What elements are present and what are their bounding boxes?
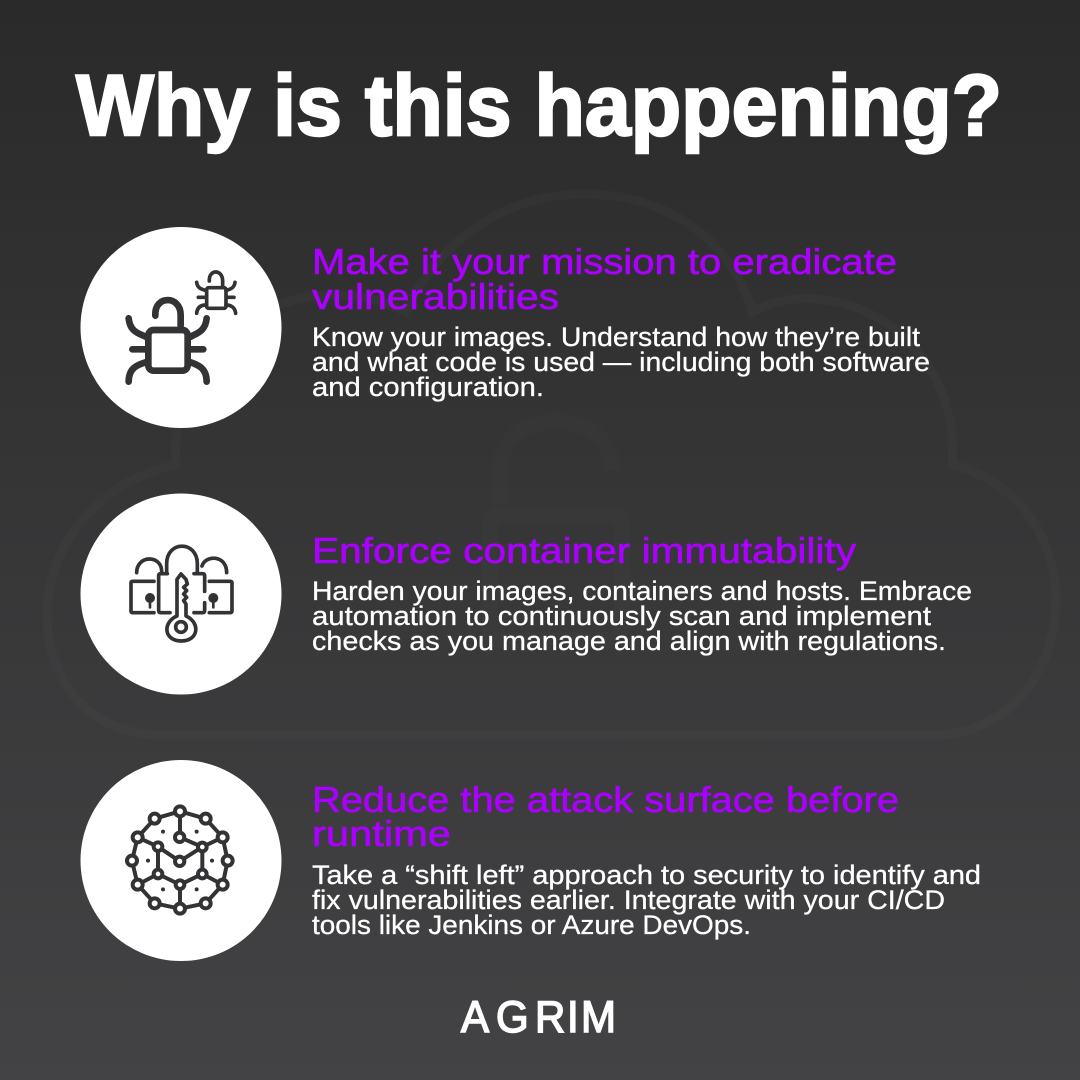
title: Why is this happening?: [76, 58, 1002, 154]
text block: Harden your images, containers and hosts. Embrace: [312, 576, 972, 606]
heading: vulnerabilities: [312, 276, 559, 317]
icon: padlocks and key: [80, 494, 282, 694]
text block: Know your images. Understand how they’re built: [312, 322, 921, 352]
panel: container immutability: [80, 494, 972, 694]
heading: runtime: [312, 813, 451, 854]
panel: eradicate vulnerabilities: [80, 227, 930, 428]
icon: padlock bugs: [80, 227, 282, 428]
text block: and what code is used — including both software: [312, 347, 930, 377]
text block: fix vulnerabilities earlier. Integrate with your CI/CD: [312, 885, 945, 915]
heading: Make it your mission to eradicate: [312, 241, 897, 282]
text block: and configuration.: [312, 372, 544, 402]
logo: AGRIM: AGRIM: [461, 993, 616, 1042]
heading: [312, 241, 897, 317]
heading: Enforce container immutability: [312, 530, 856, 571]
heading: Reduce the attack surface before: [312, 779, 899, 820]
text block: Take a “shift left” approach to security to identify and: [312, 860, 981, 890]
heading: [312, 779, 899, 854]
text block: checks as you manage and align with regulations.: [312, 626, 946, 656]
panel: reduce attack surface: [80, 760, 981, 961]
text block: tools like Jenkins or Azure DevOps.: [312, 910, 751, 940]
text block: [312, 322, 930, 402]
icon: node network sphere: [80, 760, 282, 961]
text block: [312, 860, 981, 940]
watermark: cloud with padlock: [47, 194, 1056, 735]
text block: automation to continuously scan and implement: [312, 601, 932, 631]
text block: [312, 576, 972, 656]
